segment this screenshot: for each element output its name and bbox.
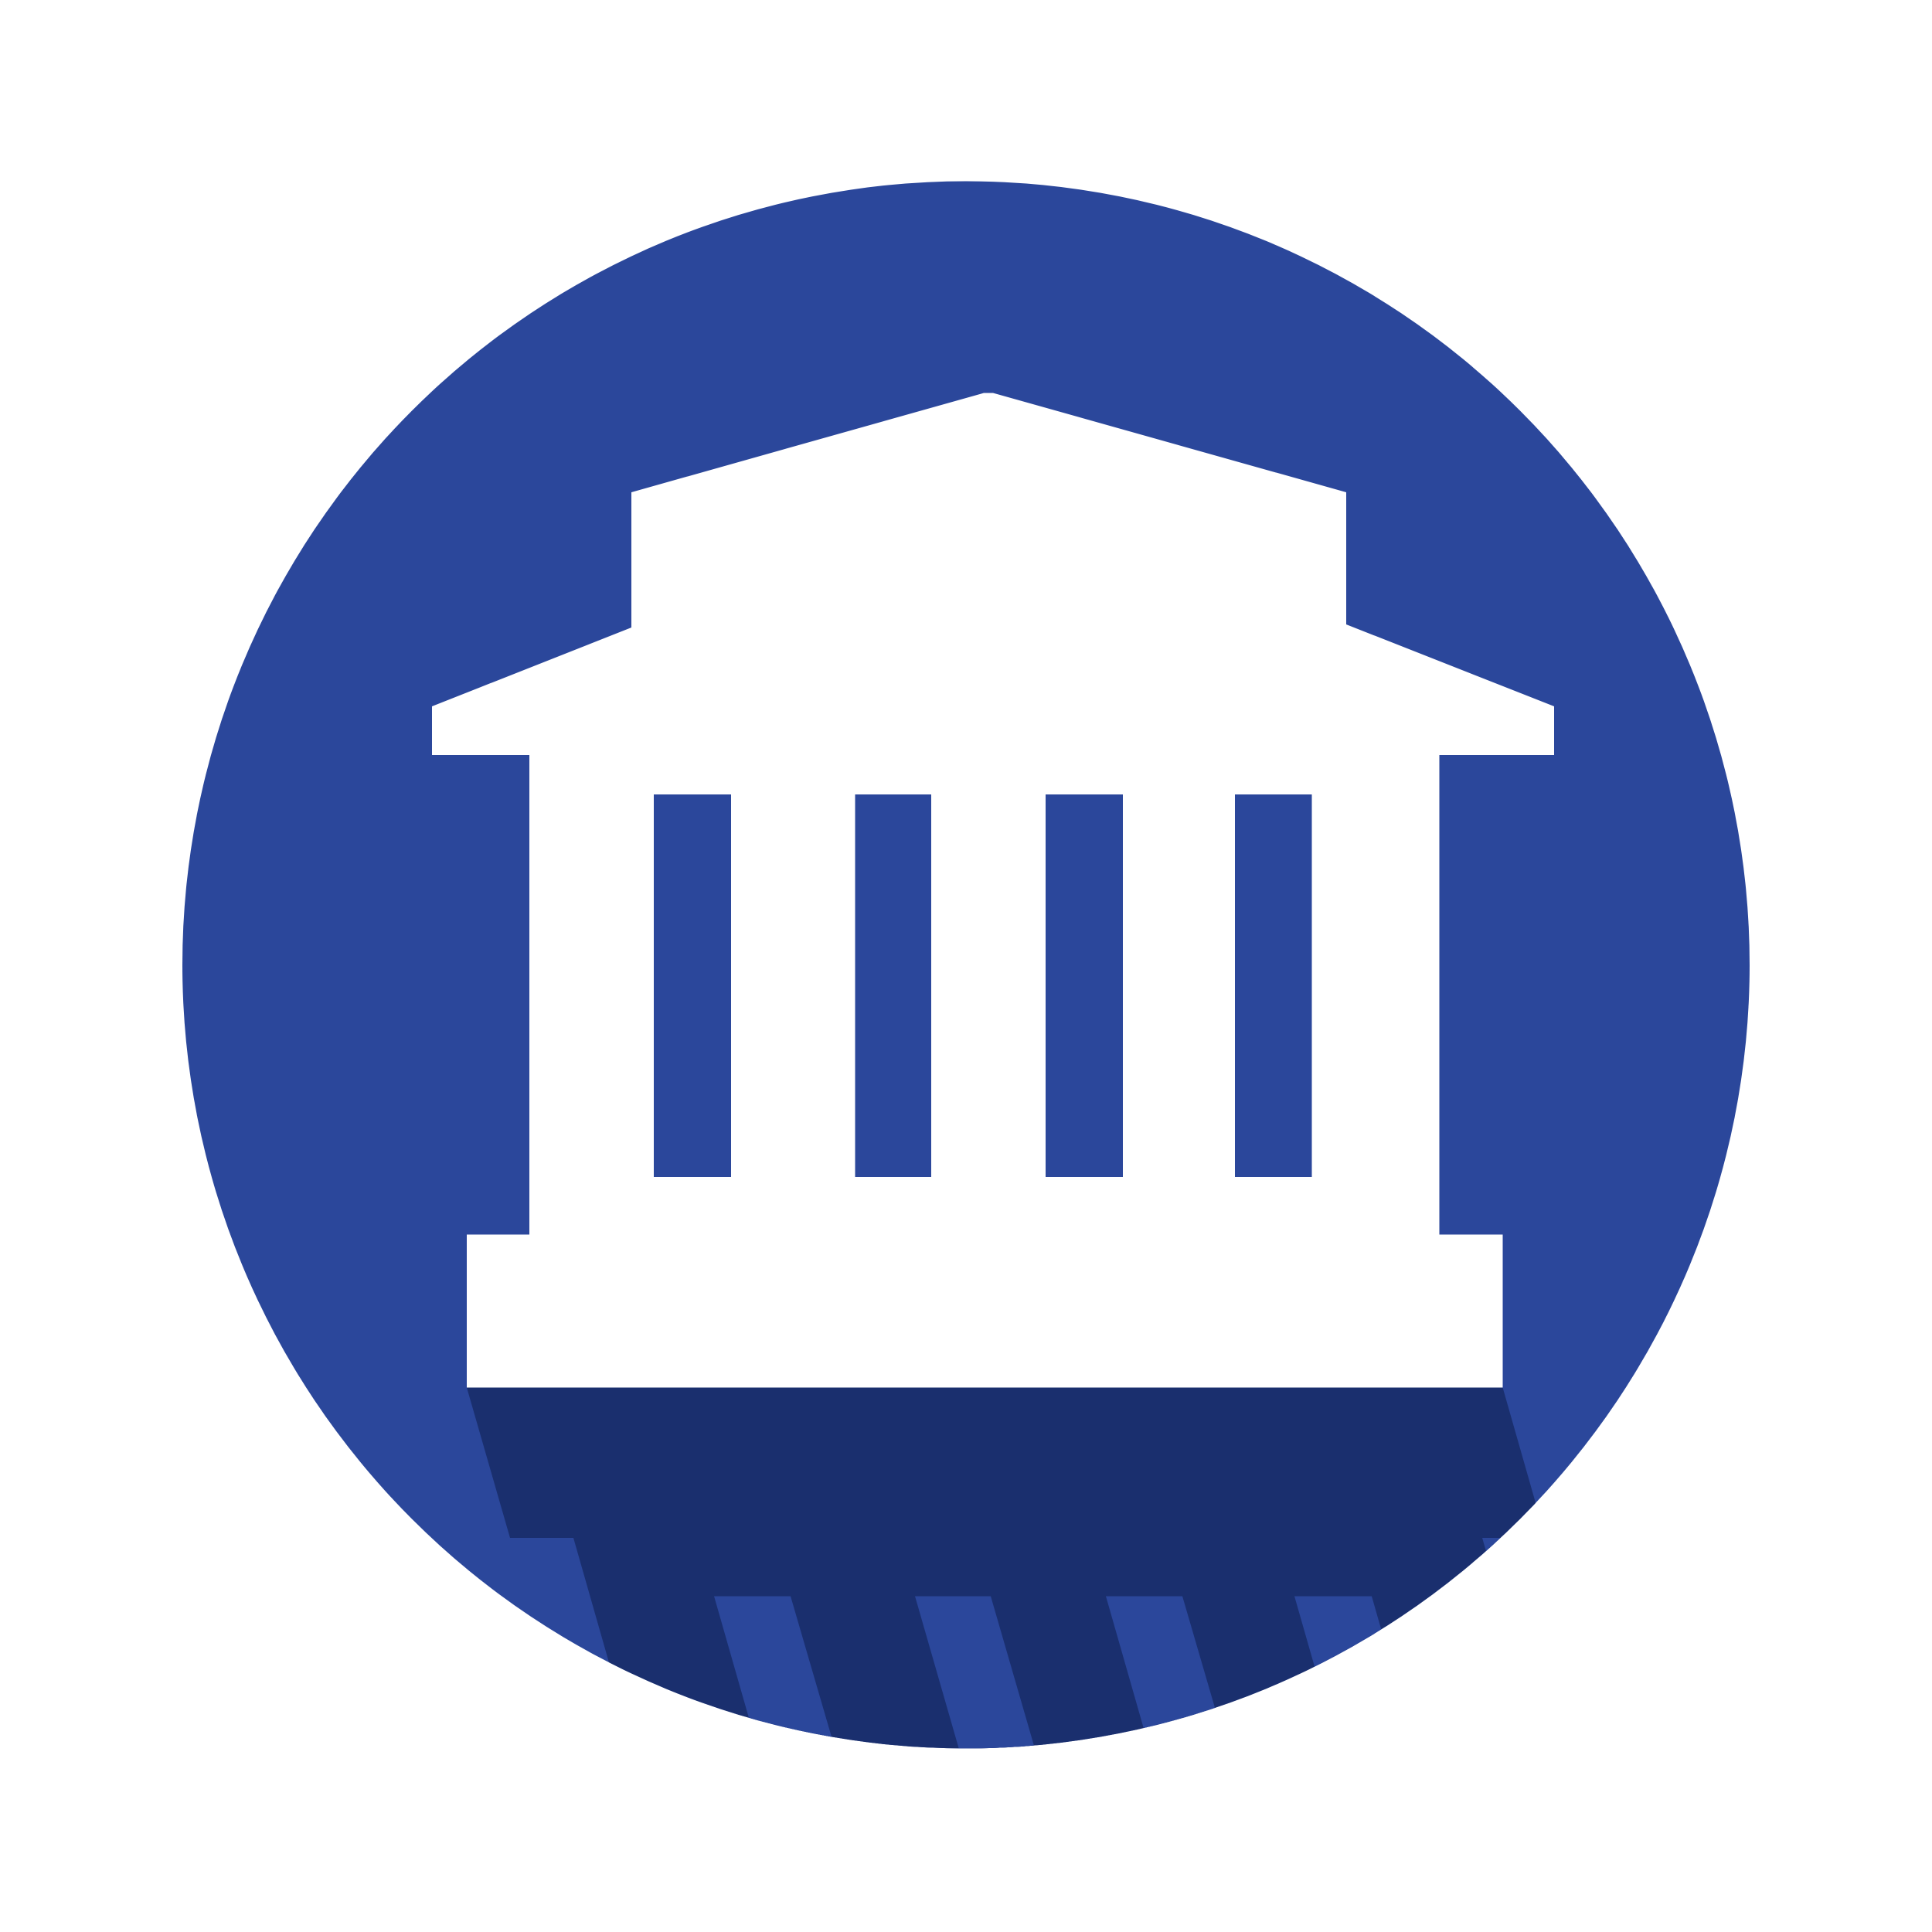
blue circle background	[182, 181, 1750, 1748]
icon: government building in a circle	[182, 181, 1750, 1748]
white building silhouette	[432, 393, 1554, 1388]
building columns	[654, 794, 1312, 1177]
shadow gaps between columns	[714, 1538, 1501, 1748]
building long shadow	[467, 1388, 1536, 1748]
